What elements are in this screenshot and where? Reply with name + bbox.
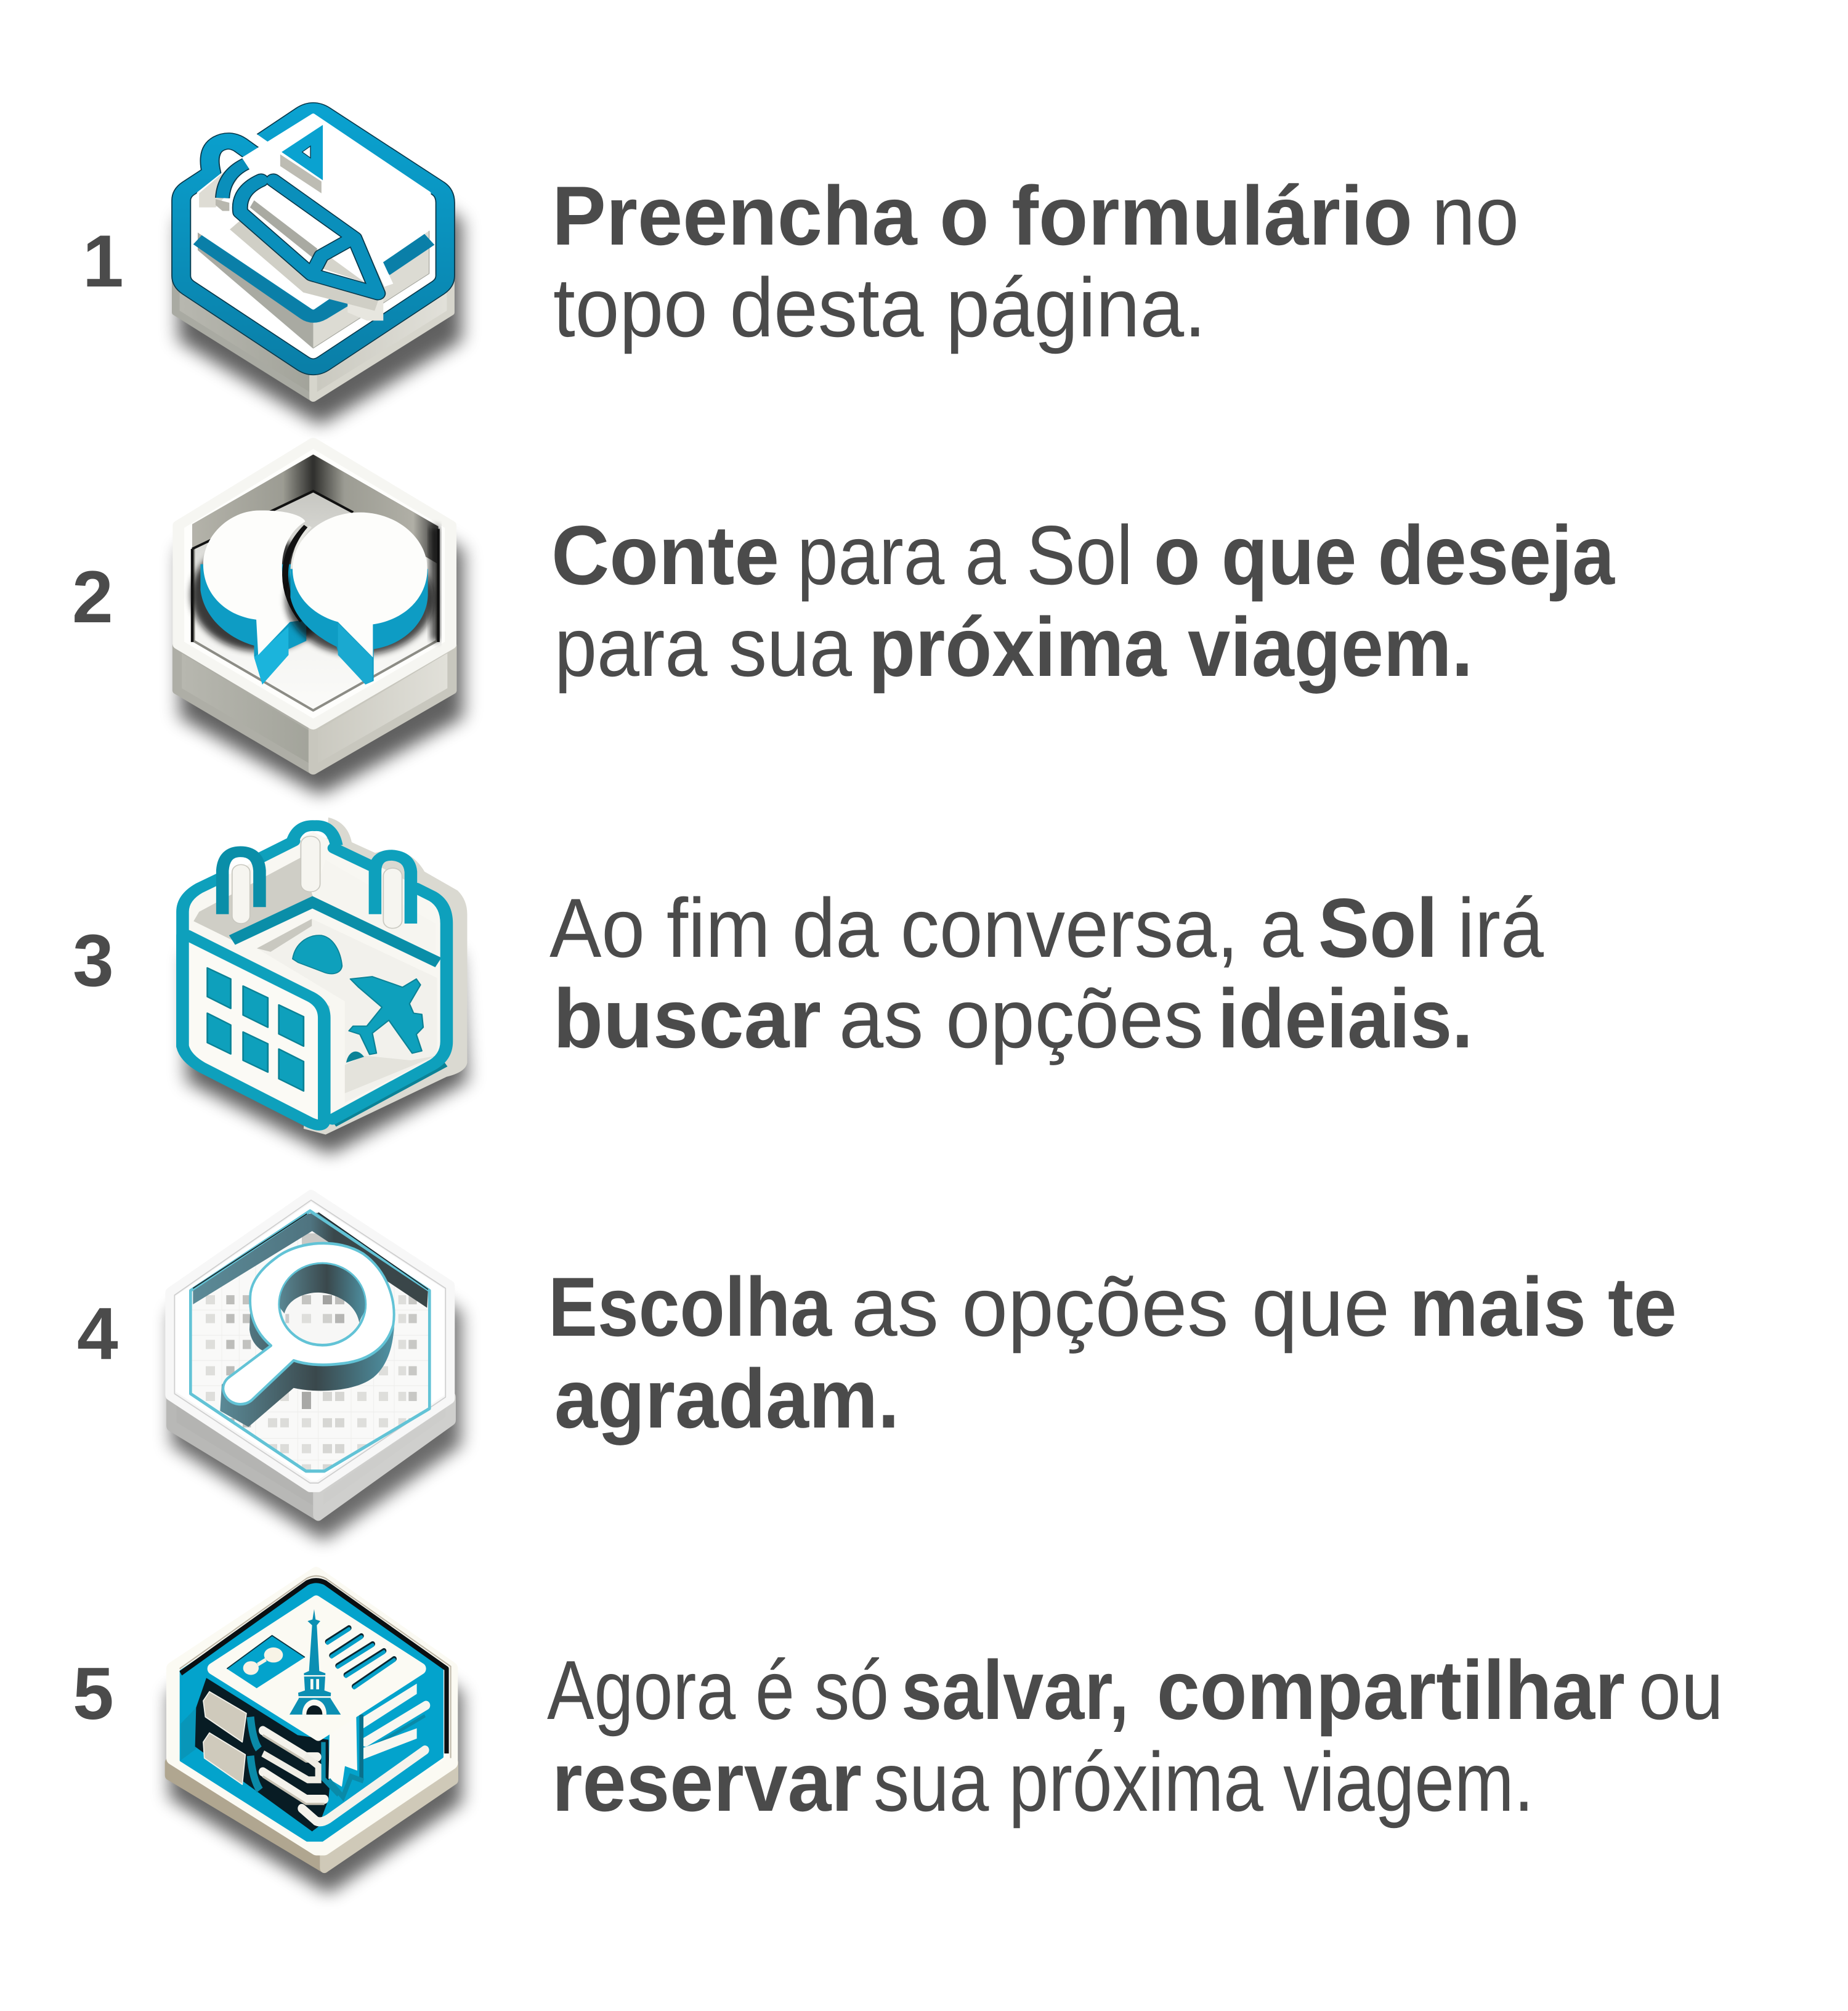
binder rings — [222, 826, 411, 928]
icon: notebook and pencil — [176, 108, 462, 426]
text 4: Escolha — [548, 1260, 832, 1354]
text 2: o que deseja — [1154, 508, 1615, 602]
text 5: salvar, — [901, 1643, 1129, 1737]
magnifier — [220, 1243, 394, 1427]
pencil — [216, 164, 383, 320]
text 4 — [548, 1260, 1677, 1445]
text lines — [328, 1628, 394, 1688]
text 1: no — [1432, 169, 1519, 262]
step 2 row — [72, 443, 1615, 795]
front panel — [182, 935, 324, 1125]
text 3: Ao fim da conversa, a — [549, 881, 1303, 975]
grid floor — [192, 1233, 428, 1470]
book stack — [180, 1678, 426, 1831]
text 2: para sua — [554, 600, 852, 694]
icon: magnifying glass — [171, 1195, 461, 1542]
right speech bubble — [285, 513, 434, 685]
number 5: 5 — [73, 1652, 114, 1735]
text 3: ideiais. — [1218, 972, 1473, 1065]
text 4: mais te — [1409, 1260, 1677, 1354]
step 4 row — [77, 1195, 1677, 1542]
number 2: 2 — [72, 556, 113, 638]
text 2: Conte — [551, 508, 779, 602]
text 3 — [549, 881, 1544, 1065]
number 4: 4 — [77, 1293, 118, 1375]
text 3: Sol — [1318, 881, 1438, 975]
text 1 — [552, 169, 1519, 354]
text 5: compartilhar — [1157, 1643, 1625, 1737]
number 3: 3 — [73, 919, 114, 1002]
icon: speech bubbles — [177, 443, 463, 795]
text 4: as opções que — [851, 1260, 1390, 1354]
step 5 row — [73, 1574, 1724, 1895]
icon: travel guide books with Eiffel tower — [169, 1574, 462, 1895]
icon: calendar with plane — [182, 818, 467, 1155]
photo — [227, 1636, 305, 1688]
text 3: as opções — [839, 972, 1204, 1065]
text 1: Preencha o formulário — [552, 169, 1412, 262]
text 1: topo desta página. — [553, 261, 1206, 354]
outer frame — [182, 841, 447, 1119]
eiffel tower — [290, 1609, 341, 1715]
text 3: irá — [1457, 881, 1544, 975]
document — [213, 1601, 421, 1735]
text 5: sua próxima viagem. — [873, 1735, 1534, 1829]
left speech bubble — [191, 511, 331, 685]
text 5: ou — [1639, 1643, 1724, 1737]
text 2 — [551, 508, 1615, 694]
text 2: próxima viagem. — [869, 600, 1473, 694]
step 3 row — [73, 818, 1544, 1155]
airplane — [349, 977, 423, 1054]
text 4: agradam. — [554, 1352, 899, 1445]
text 3: buscar — [553, 972, 821, 1065]
text 5: reservar — [552, 1735, 862, 1829]
half circle — [293, 935, 342, 974]
number 1: 1 — [83, 220, 124, 303]
date grid — [208, 968, 304, 1091]
text 2: para a Sol — [797, 508, 1133, 602]
step 1 row — [83, 108, 1519, 426]
text 5: Agora é só — [547, 1643, 889, 1737]
text 5 — [547, 1643, 1724, 1829]
triangle mark — [280, 125, 323, 193]
